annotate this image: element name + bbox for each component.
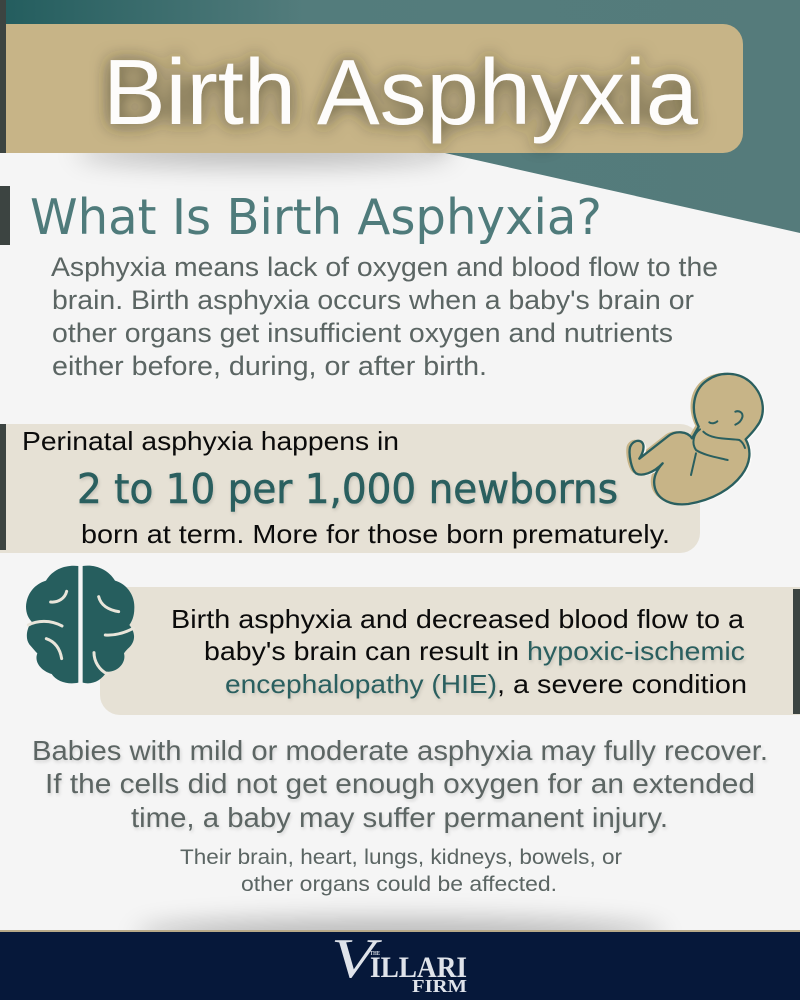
- panel: HIE explanation: [100, 587, 800, 715]
- shadow under title banner: [75, 139, 455, 165]
- recovery paragraph: time, a baby may suffer permanent injury.: [131, 802, 668, 833]
- panel: perinatal statistic: [0, 424, 700, 553]
- definition paragraph: [51, 252, 718, 381]
- shadow above footer: [135, 919, 665, 951]
- recovery paragraph: [32, 735, 768, 833]
- statistic note: born at term. More for those born prematurely.: [81, 519, 670, 549]
- HIE text: baby's brain can result in: [204, 636, 519, 666]
- recovery paragraph: If the cells did not get enough oxygen for an extended: [45, 768, 755, 799]
- heading accent bar: [0, 186, 10, 245]
- statistic value: 2 to 10 per 1,000 newborns: [77, 465, 618, 513]
- logo: The Villari Firm: V: [331, 928, 382, 990]
- definition paragraph: Asphyxia means lack of oxygen and blood flow to the: [51, 252, 718, 282]
- statistic lead-in: Perinatal asphyxia happens in: [22, 426, 399, 456]
- HIE text: encephalopathy (HIE): [225, 669, 497, 699]
- HIE text: [171, 604, 747, 699]
- definition paragraph: either before, during, or after birth.: [52, 351, 487, 381]
- logo: The Villari Firm: FIRM: [412, 976, 467, 996]
- title banner: [0, 0, 743, 153]
- logo: The Villari Firm: [331, 928, 467, 996]
- logo: The Villari Firm: THE: [370, 951, 380, 957]
- affected organs note: Their brain, heart, lungs, kidneys, bowels, or: [180, 846, 622, 869]
- recovery paragraph: Babies with mild or moderate asphyxia may fully recover.: [32, 735, 768, 766]
- affected organs note: other organs could be affected.: [241, 873, 557, 896]
- logo: The Villari Firm: ILLARI: [370, 951, 467, 984]
- affected organs note: [180, 846, 622, 896]
- heading: What Is Birth Asphyxia?: What Is Birth Asphyxia?: [30, 189, 602, 246]
- header background: teal wedge: [0, 0, 800, 233]
- title: Birth Asphyxia: [103, 40, 698, 144]
- footer: [0, 928, 800, 1000]
- HIE text: , a severe condition: [497, 669, 747, 699]
- definition paragraph: other organs get insufficient oxygen and nutrients: [52, 318, 673, 348]
- HIE text: Birth asphyxia and decreased blood flow to a: [171, 604, 745, 634]
- definition paragraph: brain. Birth asphyxia occurs when a baby's brain or: [52, 285, 694, 315]
- HIE text: hypoxic-ischemic: [527, 636, 745, 666]
- icon: baby: [626, 373, 765, 505]
- icon: brain: [26, 566, 134, 683]
